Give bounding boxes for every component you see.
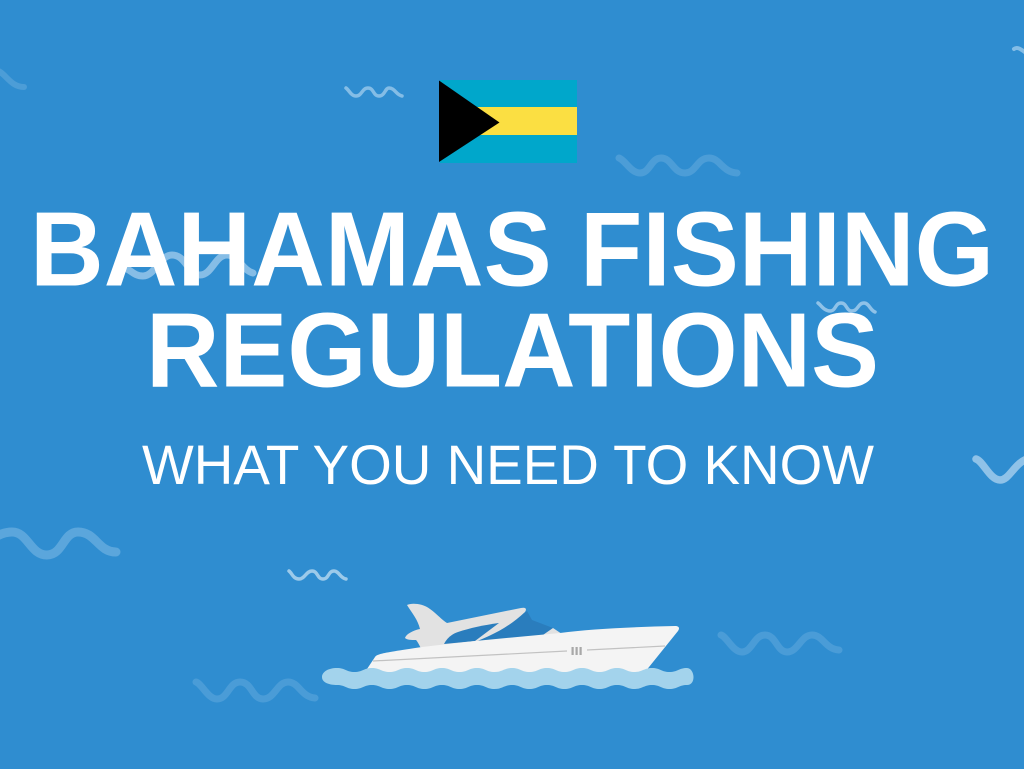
- icon: Bahamas flag: [439, 80, 577, 163]
- yacht hull stripe: [373, 646, 665, 661]
- icon: motor yacht: [322, 604, 694, 689]
- title: REGULATIONS: [146, 292, 879, 410]
- title: BAHAMAS FISHING: [30, 190, 994, 308]
- yacht hull: [365, 626, 679, 672]
- yacht flybridge: [405, 604, 526, 650]
- yacht waterline wave: [322, 668, 694, 689]
- yacht deck panel: [540, 628, 562, 637]
- title: [30, 190, 994, 410]
- yacht side window: [444, 623, 499, 644]
- yacht vents: [572, 647, 582, 655]
- subtitle: WHAT YOU NEED TO KNOW: [142, 433, 874, 496]
- yacht tinted windscreen: [470, 611, 562, 645]
